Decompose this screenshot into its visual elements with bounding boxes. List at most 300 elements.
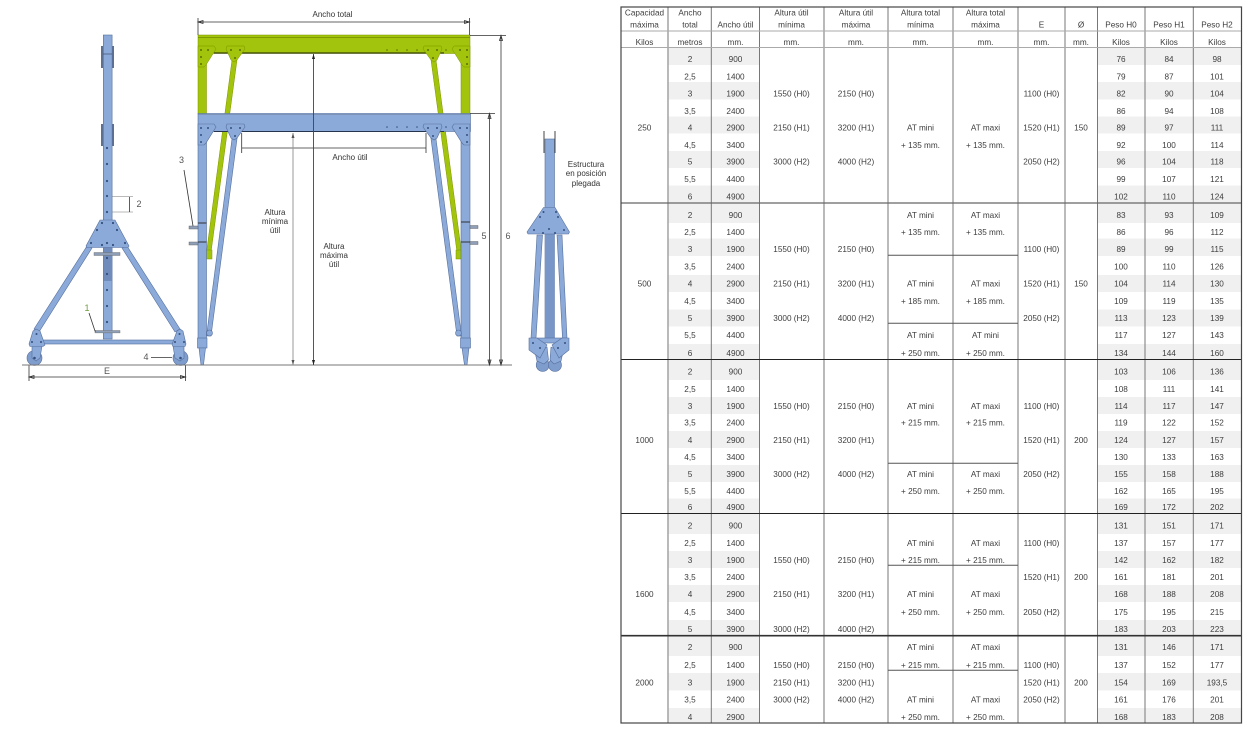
section: 2000 kg: AT maxi — [971, 696, 1000, 704]
section: 1600 kg: 182 — [1210, 556, 1224, 565]
section: 1000 kg: 4,5 — [684, 453, 696, 462]
section: 2000 kg: 193,5 — [1207, 678, 1228, 688]
section: 1600 kg: 183 — [1114, 625, 1128, 634]
folded label — [566, 160, 606, 188]
section: 500 kg: 110 — [1162, 262, 1176, 272]
section: 1600 kg: 4,5 — [684, 608, 696, 617]
section: 500 kg: 2,5 — [684, 228, 696, 237]
section: 500 kg: 113 — [1114, 314, 1128, 323]
section: 1000 kg: 6 — [688, 503, 693, 512]
section: 1600 kg: 3,5 — [684, 573, 696, 582]
section: 250 kg: 4 — [688, 124, 693, 132]
section: 1000 kg: 119 — [1114, 418, 1128, 428]
section: 1000 kg: 1100 (H0) — [1024, 402, 1060, 411]
section: 250 kg: 124 — [1210, 192, 1224, 202]
section: 500 kg: 4400 — [726, 331, 745, 340]
section: 500 kg: 93 — [1164, 211, 1174, 220]
section: 1600 kg: AT maxi — [971, 539, 1000, 548]
dimension: ancho total: Ancho total — [312, 10, 353, 19]
section: 250 kg: 111 — [1211, 124, 1224, 132]
section: 250 kg: AT maxi — [971, 124, 1000, 132]
section: 250 kg: 110 — [1162, 192, 1176, 202]
section: 1600 kg: 3000 (H2) — [773, 625, 810, 634]
dimension: altura mínima útil: mínima — [262, 217, 289, 226]
section: 1600 kg: 177 — [1210, 539, 1224, 548]
section: 2000 kg: 1400 — [726, 661, 745, 670]
ground line — [22, 364, 512, 366]
header: mm. — [1034, 38, 1049, 47]
dimension: altura máxima útil: Altura — [324, 242, 345, 251]
section: 1000 kg: 2400 — [726, 418, 745, 428]
section: 250 kg: 104 — [1210, 90, 1224, 98]
section: 250 kg: 1520 (H1) — [1023, 124, 1060, 132]
section: 1600 kg: 3200 (H1) — [838, 590, 874, 599]
section: 500 kg: 5 — [688, 314, 693, 323]
section: 2000 kg: 3000 (H2) — [773, 696, 810, 704]
header: mm. — [913, 38, 928, 47]
section: 1000 kg: 900 — [729, 368, 743, 376]
section: 250 kg: 121 — [1210, 175, 1224, 184]
header: total — [682, 20, 698, 30]
section: 1000 kg: AT maxi — [971, 402, 1000, 411]
section: 1600 kg: 171 — [1210, 522, 1224, 530]
callout 2 — [112, 196, 142, 212]
header: Altura total — [966, 8, 1005, 18]
post with clamps — [101, 35, 114, 339]
header: Capacidad — [625, 8, 665, 18]
callout 3 — [179, 155, 193, 226]
folded wheels and base plates — [529, 338, 569, 372]
section: 2000 kg: 4 — [688, 713, 693, 722]
section: 250 kg: 2150 (H0) — [838, 90, 874, 98]
section: 1000 kg: 4900 — [726, 503, 745, 512]
section: 250 kg: 1400 — [726, 72, 745, 82]
dimension: altura máxima útil: máxima — [320, 251, 349, 260]
section: 1000 kg: 130 — [1114, 453, 1128, 462]
section: 500 kg: + 135 mm. — [966, 228, 1005, 237]
section: 500 kg: 115 — [1210, 245, 1224, 254]
section: 500 kg: 143 — [1210, 331, 1224, 340]
section: 500 kg: 119 — [1162, 297, 1176, 306]
section: 500 kg: 112 — [1210, 228, 1224, 237]
section: 1000 kg: 3200 (H1) — [838, 436, 874, 445]
callout 1: 1 — [84, 303, 90, 313]
section: 1000 kg: 133 — [1162, 453, 1176, 462]
section: 2000 kg: 146 — [1162, 643, 1176, 652]
section: 500 kg: 6 — [688, 349, 693, 358]
section: 1000 kg: 3400 — [726, 453, 745, 462]
section: 500 kg: 3400 — [726, 297, 745, 306]
section: 1000 kg: 106 — [1162, 368, 1176, 376]
folded label: en posición — [566, 169, 606, 178]
header: Kilos — [1208, 38, 1226, 47]
section: 1000 kg: 152 — [1210, 418, 1224, 428]
callout 1 — [84, 303, 96, 331]
section: 1600 kg: 131 — [1114, 522, 1128, 530]
section: 2000 kg: 171 — [1210, 643, 1224, 652]
wheels and bottom plates — [27, 329, 188, 366]
header — [625, 8, 1233, 47]
section: 1600 kg: 3900 — [726, 625, 745, 634]
section: 1600 kg: 4 — [688, 590, 693, 599]
section: 1000 kg: + 250 mm. — [901, 487, 940, 496]
section: 2000 kg: 2,5 — [684, 661, 696, 670]
section: 500 kg: 4 — [688, 280, 693, 288]
section: 500 kg: + 250 mm. — [966, 349, 1005, 358]
section: 250 kg: 2,5 — [684, 72, 696, 82]
section: 1600 kg: 181 — [1162, 573, 1176, 582]
section: 1600 kg: 203 — [1162, 625, 1176, 634]
section: 1600 kg: 3 — [688, 556, 693, 565]
section: 1000 kg: + 215 mm. — [901, 418, 940, 428]
section: 1000 kg: 124 — [1114, 436, 1128, 445]
section: 250 kg: 4400 — [726, 175, 745, 184]
section: 1000 kg: 172 — [1162, 503, 1176, 512]
header: E — [1039, 20, 1045, 30]
section: 500 kg: 117 — [1114, 331, 1128, 340]
section: 250 kg: 3200 (H1) — [838, 124, 874, 132]
section: 1000 kg: 4400 — [726, 487, 745, 496]
section: 250 kg: 2400 — [726, 107, 745, 116]
section: 500 kg: 109 — [1210, 211, 1224, 220]
section: 1600 kg: 223 — [1210, 625, 1224, 634]
section: 250 kg: 3000 (H2) — [773, 158, 810, 166]
section: 250 kg: 108 — [1210, 107, 1224, 116]
section: 1600 kg: AT maxi — [971, 590, 1000, 599]
header: Ancho — [678, 8, 702, 18]
section: 2000 kg: 176 — [1162, 696, 1176, 704]
section: 250 kg: 94 — [1164, 107, 1174, 116]
section: 500 kg: 4900 — [726, 349, 745, 358]
dimension E: E — [104, 366, 110, 376]
section: 250 kg: 102 — [1114, 192, 1128, 202]
section: 250 kg: 4,5 — [684, 141, 696, 150]
section: 500 kg: 1550 (H0) — [773, 245, 810, 254]
section: 1600 kg: 215 — [1210, 608, 1224, 617]
section: 500 kg: 2900 — [726, 280, 745, 288]
folded legs — [531, 235, 567, 343]
section: 500 kg: 4,5 — [684, 297, 696, 306]
section: 1000 kg: 3 — [688, 402, 693, 411]
section: 250 kg: 98 — [1212, 55, 1222, 64]
section: 1000 kg: 5 — [688, 470, 693, 479]
folded post — [544, 131, 555, 339]
section: 2000 kg: 1100 (H0) — [1024, 661, 1060, 670]
section: 1000 kg: 2050 (H2) — [1023, 470, 1060, 479]
section: 1000 kg: 111 — [1163, 385, 1176, 394]
section: 250 kg: 86 — [1116, 107, 1126, 116]
section: 1600 kg: 5 — [688, 625, 693, 634]
section: 2000 kg: 177 — [1210, 661, 1224, 670]
section: 500 kg: AT mini — [907, 331, 934, 340]
section: 1000 kg: 1000 — [635, 436, 654, 445]
section: 250 kg: 87 — [1164, 72, 1174, 82]
section: 1000 kg: 169 — [1114, 503, 1128, 512]
section: 500 kg: 150 — [1074, 280, 1088, 288]
section: 500 kg: 114 — [1162, 280, 1176, 288]
section: 1600 kg: 2150 (H0) — [838, 556, 874, 565]
section: 250 kg: 114 — [1210, 141, 1224, 150]
section: 250 kg: 2050 (H2) — [1023, 158, 1060, 166]
section: 1000 kg: 117 — [1162, 402, 1176, 411]
callout 3: 3 — [179, 155, 184, 165]
header: Altura útil — [774, 8, 809, 18]
section: 2000 kg: 3,5 — [684, 696, 696, 704]
section: 2000 kg: 3 — [688, 678, 693, 688]
section: 500 kg: 1520 (H1) — [1023, 280, 1060, 288]
section: 250 kg: 100 — [1162, 141, 1176, 150]
triangular plate — [86, 220, 129, 248]
header: máxima — [630, 20, 659, 30]
section: 1000 kg: 2,5 — [684, 385, 696, 394]
section: 1600 kg: + 215 mm. — [901, 556, 940, 565]
section: 1600 kg: 1900 — [726, 556, 745, 565]
section: 500 kg: 3200 (H1) — [838, 280, 874, 288]
section: 2000 kg: 1520 (H1) — [1023, 678, 1060, 688]
section: 500 kg: 2 — [688, 211, 693, 220]
section: 2000 kg: 2150 (H1) — [773, 678, 810, 688]
section: 500 kg: AT maxi — [971, 211, 1000, 220]
section: 500 kg: 83 — [1116, 211, 1126, 220]
section: 500 kg: 500 — [638, 280, 652, 288]
section: 1600 kg: 200 — [1074, 573, 1088, 582]
section: 250 kg: 3,5 — [684, 107, 696, 116]
section: 1600 kg: 195 — [1162, 608, 1176, 617]
dimension 6 — [470, 36, 511, 365]
section: 1600 kg: 2900 — [726, 590, 745, 599]
section: 1600 kg: 168 — [1114, 590, 1128, 599]
section: 2000 kg: 4000 (H2) — [838, 696, 874, 704]
header: máxima — [971, 20, 1000, 30]
base legs and bottom bar — [34, 246, 180, 344]
section: 2000 kg: 2000 — [635, 678, 654, 688]
section: 1600 kg: 2050 (H2) — [1023, 608, 1060, 617]
section: 1000 kg: 1900 — [726, 402, 745, 411]
section: 1600 kg: 188 — [1162, 590, 1176, 599]
section: 1600 kg: 201 — [1210, 573, 1224, 582]
section: 250 kg: 2 — [688, 55, 693, 64]
section: 500 kg: + 135 mm. — [901, 228, 940, 237]
section: 2000 kg: 900 — [729, 643, 743, 652]
dimension E — [29, 365, 186, 381]
header: Altura útil — [839, 8, 873, 18]
dimension: ancho útil — [242, 133, 426, 162]
section: 500 kg: 134 — [1114, 349, 1128, 358]
section: 250 kg: AT mini — [907, 124, 934, 132]
section: 500 kg: 2150 (H0) — [838, 245, 874, 254]
dimension: altura máxima útil — [312, 54, 349, 365]
header: mínima — [907, 20, 934, 30]
section: 1600 kg: + 215 mm. — [966, 556, 1005, 565]
section: 1000 kg: 122 — [1162, 418, 1176, 428]
callout 4: 4 — [143, 352, 149, 362]
section: 1600 kg: 3400 — [726, 608, 745, 617]
raised position in green — [198, 35, 470, 259]
dimension: altura mínima útil: Altura — [265, 208, 286, 217]
section: 1600 kg: 162 — [1162, 556, 1176, 565]
section: 250 kg: 3400 — [726, 141, 745, 150]
lowered position in blue — [198, 114, 470, 365]
section: 500 kg: 1900 — [726, 245, 745, 254]
header: mm. — [848, 38, 864, 47]
section: 1600 kg — [635, 522, 1224, 634]
section: 1000 kg: 1550 (H0) — [773, 402, 810, 411]
section: 1000 kg: 2150 (H1) — [773, 436, 810, 445]
section: 500 kg: AT mini — [972, 331, 999, 340]
section: 250 kg: + 135 mm. — [966, 141, 1005, 150]
section: 500 kg: 160 — [1210, 349, 1224, 358]
section: 1000 kg: 3900 — [726, 470, 745, 479]
section: 1000 kg: 2900 — [726, 436, 745, 445]
section: 1600 kg: 157 — [1162, 539, 1176, 548]
section: 500 kg: 89 — [1116, 245, 1126, 254]
section: 250 kg: 89 — [1116, 124, 1126, 132]
section: 500 kg: + 185 mm. — [901, 297, 940, 306]
section: 250 kg: 4000 (H2) — [838, 158, 874, 166]
section: 1600 kg: 2150 (H1) — [773, 590, 810, 599]
header: Kilos — [1160, 38, 1178, 47]
section: 250 kg: 250 — [638, 124, 652, 132]
section: 1000 kg: 202 — [1210, 503, 1224, 512]
section: 250 kg: 84 — [1164, 55, 1174, 64]
section: 500 kg: 2050 (H2) — [1023, 314, 1060, 323]
pins — [189, 222, 478, 245]
section: 1000 kg: 195 — [1210, 487, 1224, 496]
section: 2000 kg: 2900 — [726, 713, 745, 722]
section: 2000 kg: + 215 mm. — [901, 661, 940, 670]
dimension: ancho útil: Ancho útil — [332, 153, 368, 162]
dimension 5 — [470, 114, 495, 365]
section: 250 kg: 1900 — [726, 90, 745, 98]
section: 2000 kg: AT maxi — [971, 643, 1000, 652]
header: mm. — [784, 38, 799, 47]
section: 1600 kg: 1520 (H1) — [1023, 573, 1060, 582]
section: 1000 kg: 162 — [1114, 487, 1128, 496]
header: metros — [677, 38, 703, 47]
section: 2000 kg: AT mini — [907, 696, 934, 704]
section: 500 kg: 2400 — [726, 262, 745, 272]
specifications table — [621, 7, 1242, 723]
section: 1000 kg: 147 — [1210, 402, 1224, 411]
section: 250 kg: 3 — [688, 90, 693, 98]
section: 1600 kg: 208 — [1210, 590, 1224, 599]
header: mm. — [1073, 38, 1089, 47]
section: 1000 kg: 3000 (H2) — [773, 470, 810, 479]
section: 1000 kg: 141 — [1210, 385, 1224, 394]
section: 1600 kg: 175 — [1114, 608, 1128, 617]
section: 2000 kg: 2 — [688, 643, 693, 652]
dimension 6: 6 — [505, 231, 511, 241]
section: 500 kg: AT maxi — [971, 280, 1000, 288]
section: 250 kg: 900 — [729, 55, 743, 64]
section: 1000 kg: 4 — [688, 436, 693, 445]
section: 2000 kg: 2150 (H0) — [838, 661, 874, 670]
section: 250 kg: 104 — [1162, 158, 1176, 166]
section: 250 kg: 150 — [1074, 124, 1088, 132]
section: 500 kg: 3,5 — [684, 262, 696, 272]
header: Altura total — [901, 8, 940, 18]
section: 1000 kg: 158 — [1162, 470, 1176, 479]
section: 500 kg: 96 — [1164, 228, 1174, 237]
section: 250 kg — [638, 55, 1224, 202]
section: 250 kg: 99 — [1116, 175, 1126, 184]
section: 1600 kg: 161 — [1114, 573, 1128, 582]
header: Ø — [1078, 20, 1085, 30]
section: 500 kg: 135 — [1210, 297, 1224, 306]
section: 1600 kg: 1600 — [635, 590, 654, 599]
section: 500 kg: 126 — [1210, 262, 1224, 272]
section: 1600 kg: AT mini — [907, 590, 934, 599]
section: 1000 kg: 114 — [1114, 402, 1128, 411]
section: 1600 kg: 900 — [729, 522, 743, 530]
section: 2000 kg: 2400 — [726, 696, 745, 704]
diagram: folded structure — [527, 131, 606, 372]
section: 250 kg: 5 — [688, 158, 693, 166]
section: 500 kg: 99 — [1164, 245, 1174, 254]
section: 2000 kg: 1900 — [726, 678, 745, 688]
section: 1600 kg: 142 — [1114, 556, 1128, 565]
section: 250 kg: 118 — [1210, 158, 1224, 166]
section: 2000 kg: 131 — [1114, 643, 1128, 652]
dimension: altura mínima útil: útil — [270, 226, 280, 235]
section: 250 kg: 96 — [1116, 158, 1126, 166]
section: 2000 kg — [635, 643, 1228, 722]
section: 1000 kg: 5,5 — [684, 487, 696, 496]
section: 250 kg: 90 — [1164, 90, 1174, 98]
section: 1000 kg: 4000 (H2) — [838, 470, 874, 479]
section: 2000 kg: + 215 mm. — [966, 661, 1005, 670]
dimension 5: 5 — [481, 231, 487, 241]
section: 250 kg: 1100 (H0) — [1024, 90, 1060, 98]
callout 4 — [143, 352, 172, 362]
section: 2000 kg: 200 — [1074, 678, 1088, 688]
folded label: Estructura — [568, 160, 605, 169]
section: 1000 kg: 1400 — [726, 385, 745, 394]
section: 1000 kg: AT mini — [907, 402, 934, 411]
diagram: side view of gantry with base — [27, 35, 188, 381]
section: 1600 kg: 2 — [688, 522, 693, 530]
section: 2000 kg: 154 — [1114, 678, 1128, 688]
section: 500 kg: 3000 (H2) — [773, 314, 810, 323]
section: 2000 kg: AT mini — [907, 643, 934, 652]
dimension: ancho total — [198, 10, 470, 35]
header: Kilos — [636, 38, 653, 47]
section: 250 kg: 82 — [1116, 90, 1126, 98]
section: 1000 kg: 163 — [1210, 453, 1224, 462]
section: 250 kg: 2150 (H1) — [773, 124, 810, 132]
dimension: altura mínima útil — [262, 133, 294, 365]
section: 1000 kg: 108 — [1114, 385, 1128, 394]
section: 2000 kg: + 250 mm. — [901, 713, 940, 722]
section: 1000 kg: 2 — [688, 368, 693, 376]
section: 1600 kg: 1550 (H0) — [773, 556, 810, 565]
section: 500 kg: AT mini — [907, 280, 934, 288]
header: máxima — [842, 20, 871, 30]
section: 2000 kg: 168 — [1114, 713, 1128, 722]
section: 1600 kg: + 250 mm. — [901, 608, 940, 617]
folded plate — [527, 208, 570, 234]
section: 1000 kg: 2150 (H0) — [838, 402, 874, 411]
section: 250 kg: 1550 (H0) — [773, 90, 810, 98]
section: 1600 kg: 151 — [1162, 522, 1176, 530]
section: 500 kg: 1100 (H0) — [1024, 245, 1060, 254]
section: 1600 kg: 2,5 — [684, 539, 696, 548]
section: 1000 kg: 200 — [1074, 436, 1088, 445]
section: 1000 kg: 157 — [1210, 436, 1224, 445]
dimension: altura máxima útil: útil — [329, 260, 339, 269]
section: 500 kg: 3 — [688, 245, 693, 254]
header: Kilos — [1112, 38, 1130, 47]
